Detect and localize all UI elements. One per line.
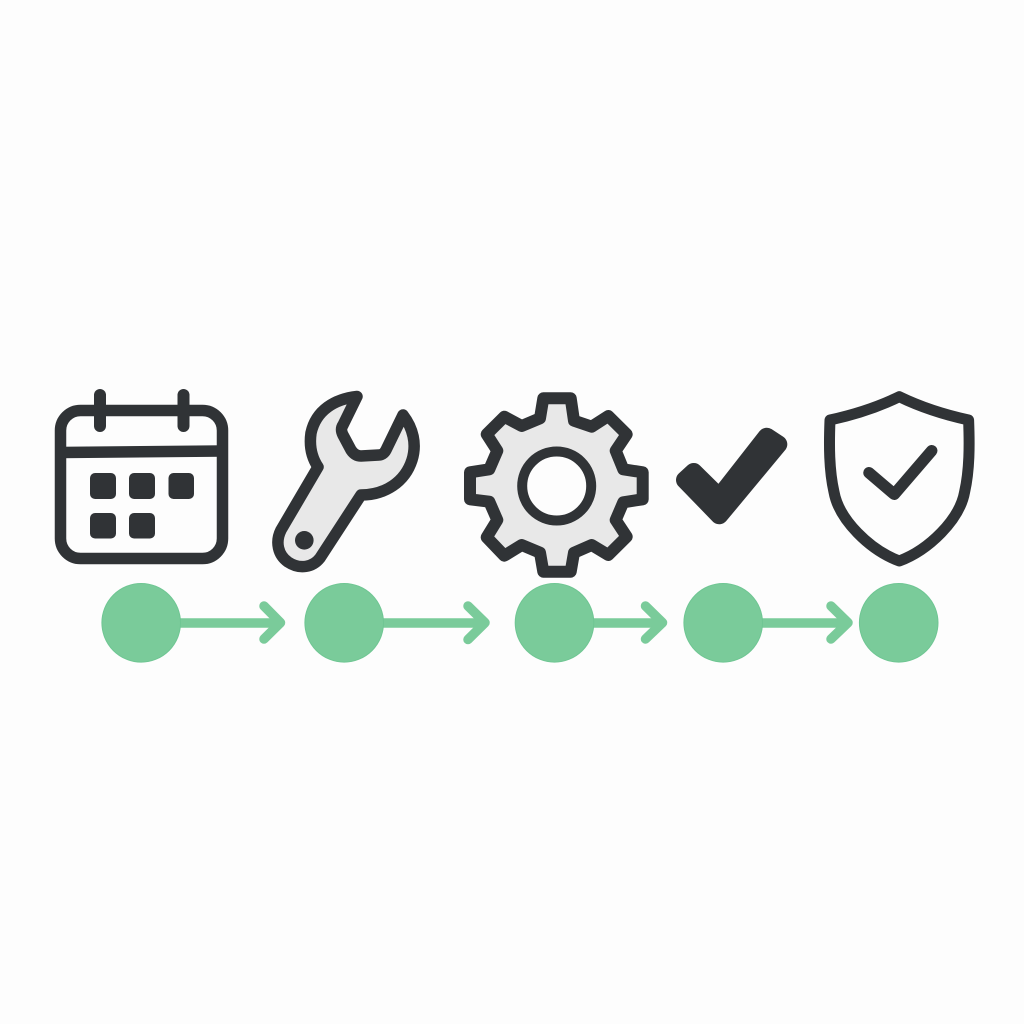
icon: wrench [278,396,414,567]
timeline [102,584,938,662]
icon: check mark [685,437,778,515]
arrow 1 [175,606,280,639]
step node 1 [102,584,180,662]
step node 5 [859,584,938,662]
icon: shield [829,397,969,561]
arrow 4 [758,606,848,639]
icon: gear [470,398,643,572]
step node 3 [515,584,594,662]
icon: calendar [60,395,222,558]
step node 4 [684,584,762,662]
step node 2 [305,584,384,662]
arrow 3 [588,606,662,639]
arrow 2 [378,606,485,640]
